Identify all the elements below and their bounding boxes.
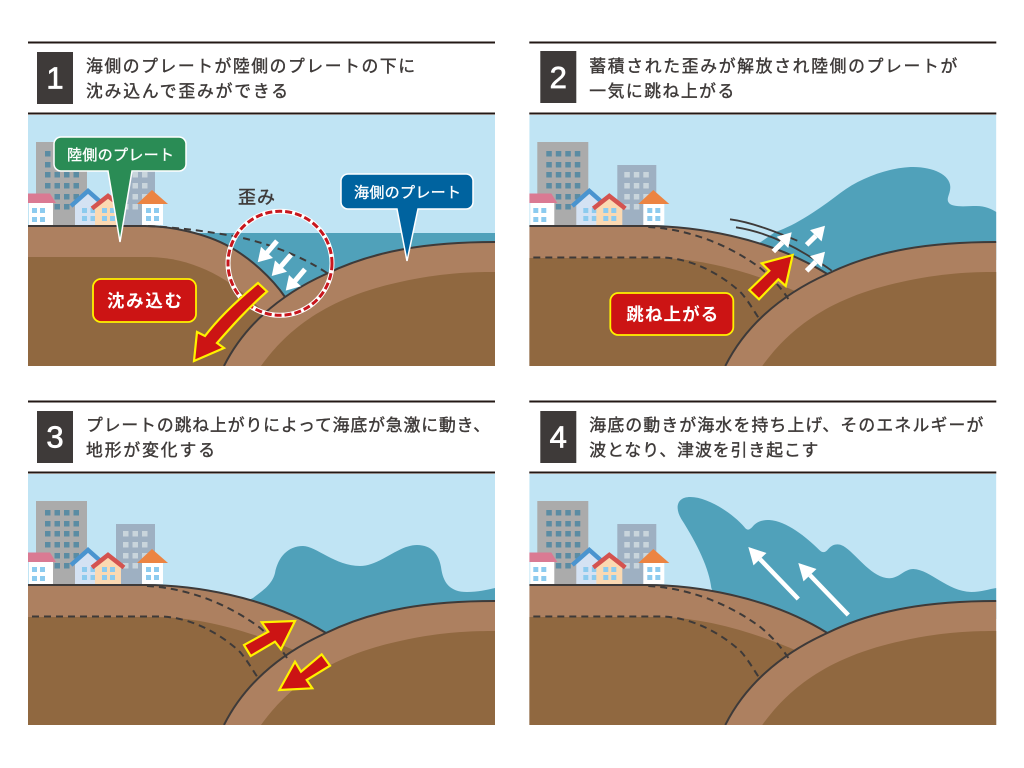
label: sinking: 沈み込む bbox=[107, 291, 182, 311]
arrow: sinking bbox=[194, 283, 267, 361]
panel 1 heading: 1 bbox=[46, 60, 64, 96]
panel 3 heading: 地形が変化する bbox=[86, 441, 215, 460]
panel 1 heading: 沈み込んで歪みができる bbox=[86, 82, 288, 101]
panel 4 heading: 4 bbox=[550, 420, 567, 454]
panel 1 heading bbox=[28, 42, 495, 114]
panel 3 heading: プレートの跳ね上がりによって海底が急激に動き、 bbox=[86, 416, 490, 435]
strain circle bbox=[228, 211, 332, 315]
panel 4 scene bbox=[529, 474, 996, 725]
panel 2 heading: 蓄積された歪みが解放され陸側のプレートが bbox=[589, 57, 958, 76]
panel 4 heading: 海底の動きが海水を持ち上げ、そのエネルギーが bbox=[589, 416, 984, 435]
panel 4 heading: 波となり、津波を引き起こす bbox=[589, 441, 818, 460]
callout: ocean plate: 海側のプレート bbox=[354, 184, 461, 202]
panel 4: tsunami bbox=[529, 400, 996, 759]
panel 2: rebound bbox=[529, 42, 996, 400]
callout: ocean plate bbox=[341, 174, 473, 261]
rebound white arrows bbox=[773, 226, 825, 271]
panel 4 heading bbox=[529, 400, 996, 474]
panel 2 heading: 一気に跳ね上がる bbox=[589, 82, 734, 101]
callout: land plate: 陸側のプレート bbox=[67, 147, 174, 164]
panel 2 heading bbox=[529, 42, 996, 114]
strain label: 歪み bbox=[238, 188, 275, 208]
label: sinking bbox=[93, 279, 196, 322]
panel 2 scene bbox=[529, 115, 996, 366]
panel 1 scene bbox=[28, 115, 495, 366]
strain arrows bbox=[258, 241, 305, 291]
arrow: rebound bbox=[749, 255, 793, 299]
arrow: land plate moves up bbox=[244, 621, 295, 656]
arrow: ocean plate moves down bbox=[279, 654, 330, 690]
panel 1 heading: 海側のプレートが陸側のプレートの下に bbox=[86, 57, 415, 76]
motion lines bbox=[730, 219, 832, 271]
panel 3 heading: 3 bbox=[46, 420, 64, 454]
panel 1: subduction strain bbox=[28, 42, 495, 400]
panel 2 heading: 2 bbox=[550, 60, 567, 95]
label: rebound bbox=[610, 293, 733, 335]
panel 3: seabed moves bbox=[28, 400, 495, 759]
label: rebound: 跳ね上がる bbox=[626, 304, 718, 324]
callout: land plate bbox=[54, 137, 186, 242]
wave white arrows bbox=[748, 547, 848, 615]
panel 3 heading bbox=[28, 400, 495, 474]
panel 3 scene bbox=[28, 474, 495, 725]
